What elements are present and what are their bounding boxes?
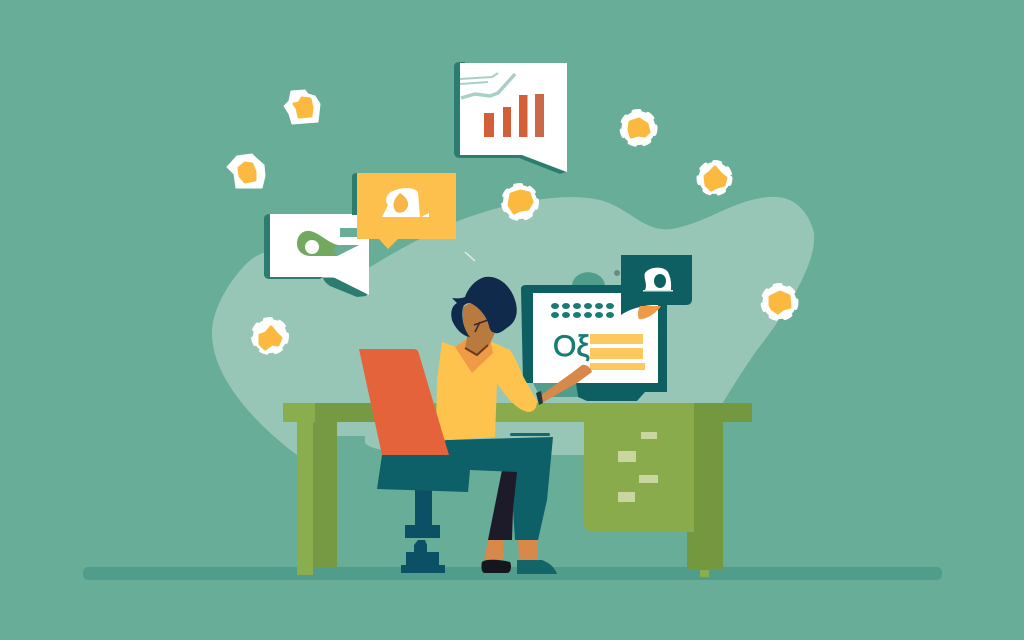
forearm bbox=[537, 365, 592, 404]
bubble shadow bbox=[352, 173, 365, 215]
user icon bbox=[382, 188, 420, 217]
necklace bbox=[465, 345, 488, 355]
chart bubble bbox=[454, 62, 567, 174]
background blob bbox=[212, 197, 814, 455]
hair bbox=[451, 277, 517, 337]
monitor base shadow bbox=[533, 383, 578, 397]
bar chart bbox=[484, 94, 544, 137]
back leg bbox=[488, 470, 518, 540]
dark bubble bbox=[621, 255, 692, 319]
badge bbox=[284, 90, 320, 124]
desk bbox=[283, 403, 752, 577]
floor shadow bbox=[83, 567, 942, 580]
bubble body bbox=[357, 173, 456, 249]
back foot bbox=[484, 540, 504, 560]
chair stem bbox=[415, 483, 432, 526]
screen number: Oξ bbox=[553, 330, 590, 363]
desk drawer bbox=[584, 422, 694, 532]
badge bbox=[762, 285, 796, 319]
orange leaf bbox=[638, 306, 661, 319]
bubble shadow bbox=[264, 214, 323, 279]
person bbox=[377, 277, 592, 574]
desk left leg bbox=[297, 422, 313, 575]
office chair bbox=[401, 483, 445, 573]
screen text bars bbox=[590, 334, 645, 370]
bubble shadow bbox=[454, 62, 566, 174]
watch bbox=[536, 391, 543, 405]
small dash bbox=[465, 252, 475, 261]
monitor frame bbox=[521, 285, 667, 401]
front foot bbox=[518, 540, 538, 561]
dots grid bbox=[551, 303, 614, 318]
trousers and seat bbox=[377, 437, 553, 540]
yellow bubble bbox=[352, 173, 456, 249]
monitor dome bbox=[572, 272, 605, 285]
drawer handles bbox=[618, 432, 658, 502]
desk right leg bbox=[694, 422, 723, 532]
badge bbox=[227, 154, 265, 188]
bubble body bbox=[270, 214, 369, 295]
bubble body bbox=[460, 63, 567, 172]
monitor bbox=[521, 270, 667, 401]
pin icon bbox=[297, 231, 359, 256]
badge bbox=[253, 319, 287, 353]
badge bbox=[622, 111, 656, 145]
user icon bbox=[645, 268, 671, 290]
yellow sweater bbox=[436, 342, 537, 440]
badge bbox=[698, 162, 730, 194]
bubble body bbox=[621, 255, 692, 315]
monitor screen bbox=[533, 293, 658, 383]
collar bbox=[455, 338, 493, 373]
facial lines bbox=[474, 320, 488, 332]
chair back bbox=[359, 349, 449, 455]
desk top bbox=[315, 403, 415, 422]
badge bbox=[503, 185, 537, 219]
line chart bbox=[460, 73, 515, 98]
monitor pin bbox=[614, 270, 620, 276]
neck and face bbox=[463, 303, 495, 355]
floating badges bbox=[227, 90, 796, 353]
lap line bbox=[510, 433, 550, 436]
white location bubble bbox=[264, 214, 369, 297]
